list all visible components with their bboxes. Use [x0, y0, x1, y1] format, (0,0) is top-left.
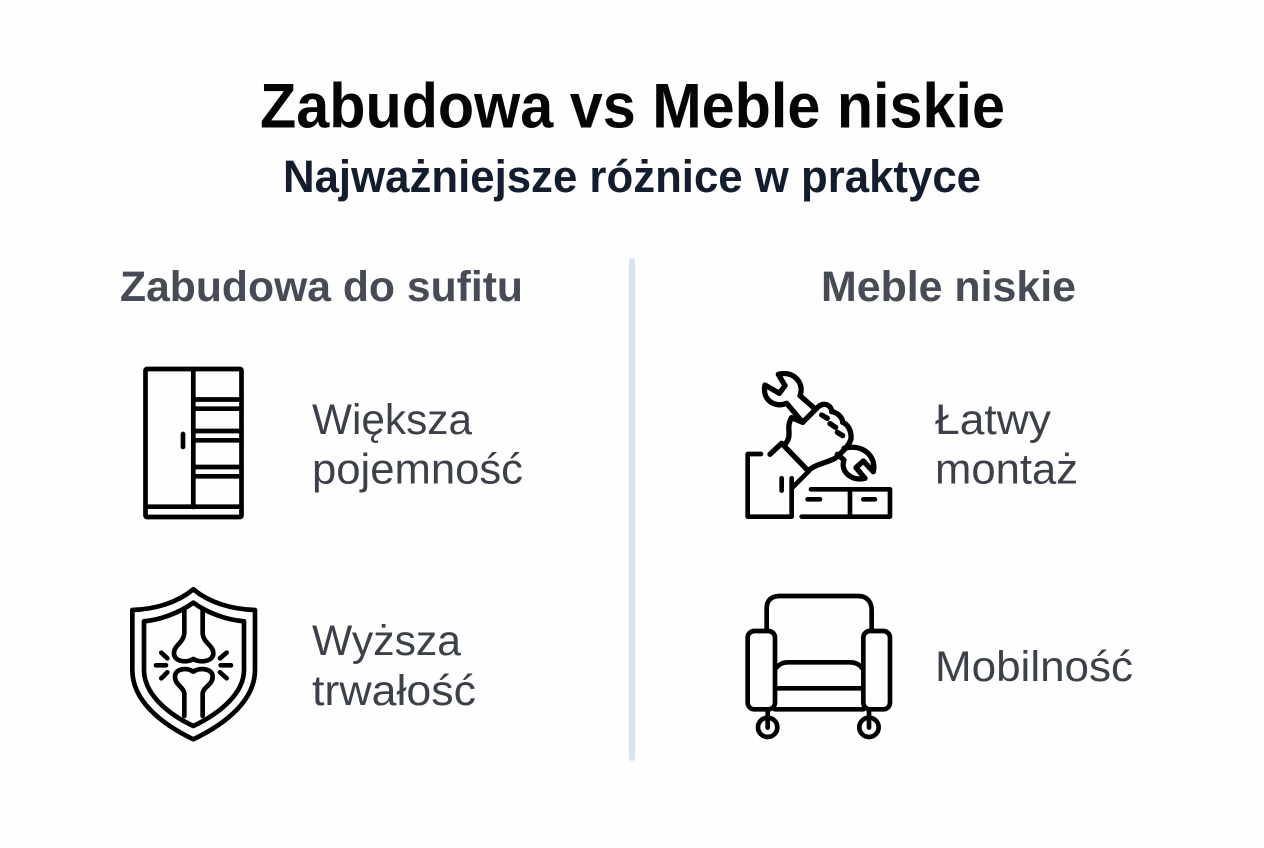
title: Zabudowa vs Meble niskie [260, 72, 1005, 142]
panel: Zabudowa do sufitu [120, 263, 523, 739]
text: Większa pojemność [312, 396, 523, 494]
text: Mobilność: Mobilność [935, 643, 1133, 691]
icon: hand with wrench and cabinets [748, 373, 890, 517]
text: Łatwy montaż: montaż [935, 446, 1078, 494]
text: Łatwy montaż: Łatwy [935, 396, 1052, 444]
text: Wyższa trwałość: Wyższa [312, 617, 461, 665]
bones and rays [156, 610, 231, 716]
icon: wardrobe [146, 369, 242, 517]
icon: armchair on wheels [748, 596, 890, 737]
heading: Meble niskie: Meble niskie [821, 263, 1076, 311]
text: Większa pojemność: pojemność [312, 446, 523, 494]
icon: shield with joint [132, 589, 255, 739]
text: Łatwy montaż [935, 396, 1078, 494]
divider between columns [629, 258, 635, 761]
subtitle: Najważniejsze różnice w praktyce [283, 151, 981, 202]
text: Wyższa trwałość: trwałość [312, 667, 476, 715]
text: Większa pojemność: Większa [312, 396, 472, 444]
text: Wyższa trwałość [312, 617, 476, 715]
panel: Meble niskie [748, 263, 1133, 737]
hand and wrench [764, 373, 874, 479]
heading: Zabudowa do sufitu: Zabudowa do sufitu [120, 263, 523, 311]
